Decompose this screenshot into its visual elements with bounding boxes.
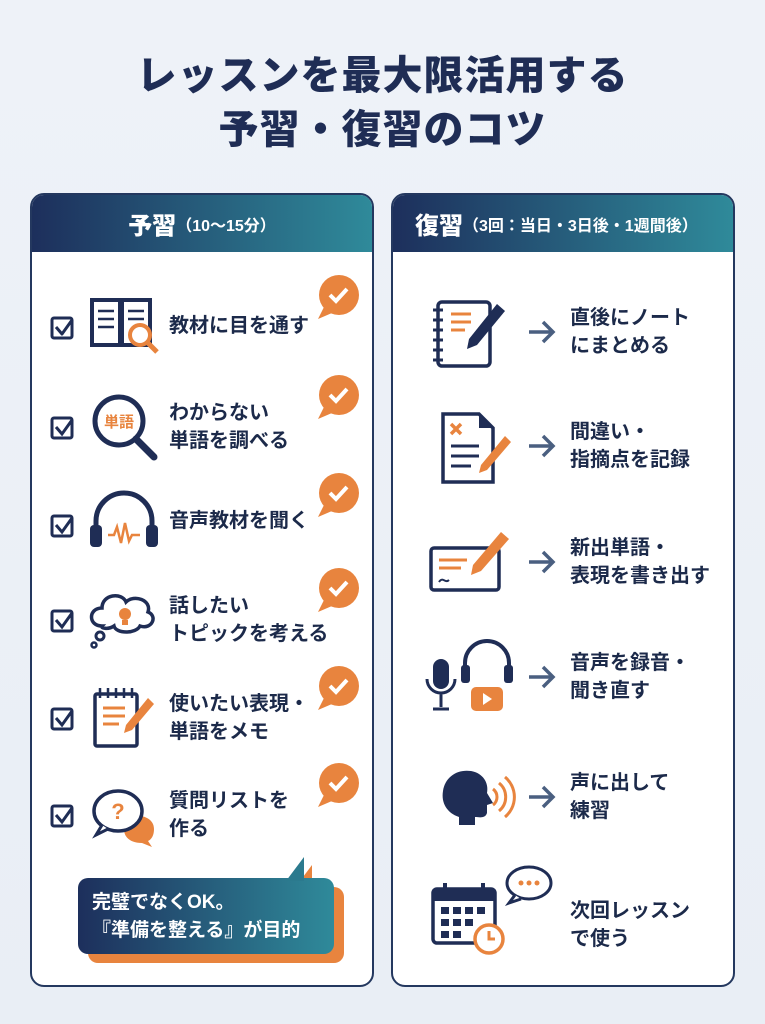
text: 聞き直す: [570, 680, 650, 702]
callout: 『準備を整える』が目的: [92, 920, 300, 941]
panel: review: [391, 193, 735, 987]
text: [169, 790, 289, 840]
callout: [78, 857, 344, 963]
text: 指摘点を記録: [570, 449, 690, 471]
title: レッスンを最大限活用する: [136, 54, 628, 98]
review item 4: [426, 639, 690, 711]
text: [169, 692, 309, 743]
text: 使いたい表現・: [169, 693, 309, 715]
text: 声に出して: [570, 772, 669, 794]
item 5: [50, 666, 359, 748]
heading: preview: [32, 195, 372, 252]
heading: preview: 予習: [128, 213, 176, 240]
text: 直後にノート: [570, 307, 690, 329]
text: 音声教材を聞く: [169, 510, 309, 532]
text: [570, 772, 669, 822]
item 4: [50, 568, 359, 649]
panel: preview: [30, 193, 374, 987]
text: で使う: [570, 928, 630, 950]
review item 1: [433, 300, 690, 368]
text: [570, 306, 690, 357]
text: 間違い・: [570, 421, 650, 443]
text: 練習: [570, 800, 610, 822]
text: [570, 536, 710, 587]
callout: 完璧でなくOK。: [92, 892, 235, 913]
item 6: ?: [111, 799, 125, 824]
text: 新出単語・: [570, 537, 670, 559]
text: トピックを考える: [169, 623, 328, 645]
review item 6: [431, 866, 690, 955]
text: わからない: [169, 402, 269, 424]
heading: review: （3回：当日・3日後・1週間後）: [463, 218, 698, 234]
review item 5: [442, 770, 669, 825]
text: 質問リストを: [169, 790, 289, 812]
text: 音声を録音・: [570, 652, 690, 674]
item 2: [50, 375, 359, 460]
text: 単語を調べる: [169, 430, 289, 452]
text: 次回レッスン: [570, 900, 690, 922]
text: [570, 652, 690, 702]
text: 作る: [169, 818, 209, 840]
text: 教材に目を通す: [169, 315, 309, 337]
title: [136, 54, 628, 152]
text: [169, 402, 289, 452]
item 2: 単語: [104, 413, 134, 431]
item 1: [50, 275, 359, 354]
review item 2: [441, 412, 690, 484]
text: 単語をメモ: [169, 721, 269, 743]
text: [570, 420, 690, 471]
heading: review: [393, 195, 733, 252]
review item 3: [429, 532, 710, 592]
text: 表現を書き出す: [570, 565, 710, 587]
title: 予習・復習のコツ: [218, 108, 546, 152]
text: [570, 900, 690, 950]
item 3: [50, 473, 359, 547]
heading: preview: （10〜15分）: [176, 218, 276, 234]
heading: review: 復習: [415, 213, 463, 240]
text: にまとめる: [570, 335, 670, 357]
text: [169, 595, 328, 645]
text: 話したい: [169, 595, 249, 617]
item 6: [50, 763, 359, 847]
